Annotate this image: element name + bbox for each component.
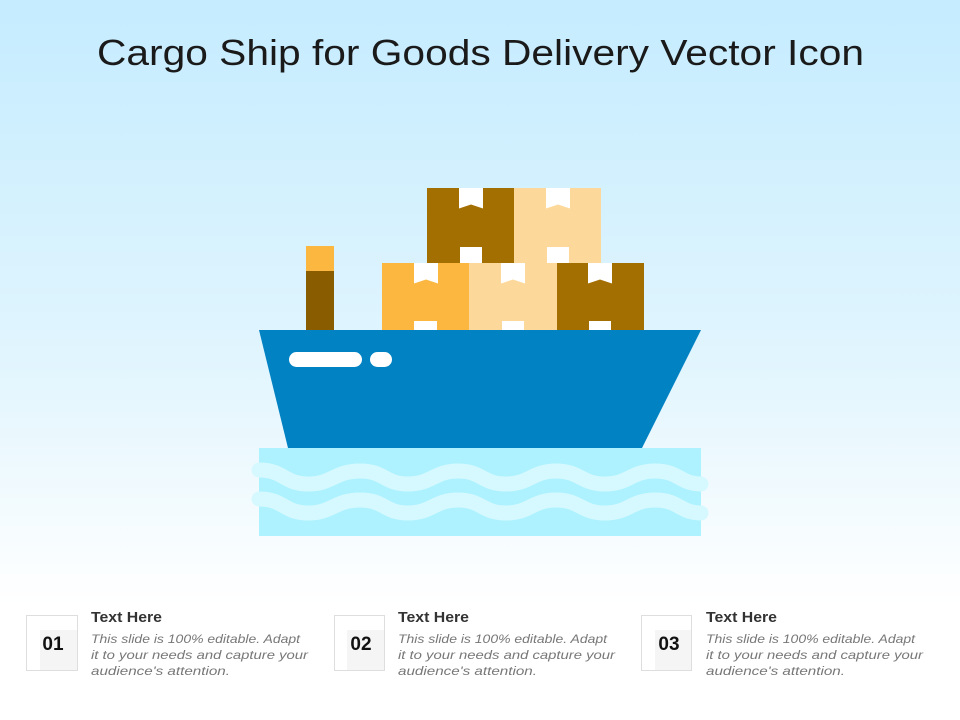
description 03 (706, 632, 924, 678)
description 02: audience's attention. (398, 664, 537, 678)
heading 01: Text Here (91, 610, 162, 626)
description 02: it to your needs and capture your (398, 648, 616, 662)
description 03: audience's attention. (706, 664, 845, 678)
number box 01: 01 (42, 634, 64, 655)
ship funnel (306, 246, 334, 330)
description 01: This slide is 100% editable. Adapt (91, 632, 301, 646)
item 02 (334, 610, 616, 678)
icon: cargo ship (259, 188, 701, 536)
item 01 (26, 610, 309, 678)
number box 02: 02 (350, 634, 372, 655)
description 02: This slide is 100% editable. Adapt (398, 632, 608, 646)
water (259, 448, 701, 536)
description 01: it to your needs and capture your (91, 648, 309, 662)
top row cargo boxes (427, 188, 601, 263)
waves (259, 470, 701, 513)
description 03: This slide is 100% editable. Adapt (706, 632, 916, 646)
number box 01 (26, 616, 78, 670)
description 02 (398, 632, 616, 678)
description 03: it to your needs and capture your (706, 648, 924, 662)
ship hull (259, 330, 701, 448)
hull portholes (289, 352, 392, 367)
title: Cargo Ship for Goods Delivery Vector Icon (97, 32, 864, 73)
item 03 (642, 610, 924, 678)
number box 02 (334, 616, 384, 670)
heading 02: Text Here (398, 610, 469, 626)
number box 03: 03 (658, 634, 680, 655)
number box 03 (642, 616, 692, 670)
heading 03: Text Here (706, 610, 777, 626)
description 01: audience's attention. (91, 664, 230, 678)
description 01 (91, 632, 309, 678)
bottom row cargo boxes (382, 263, 644, 330)
